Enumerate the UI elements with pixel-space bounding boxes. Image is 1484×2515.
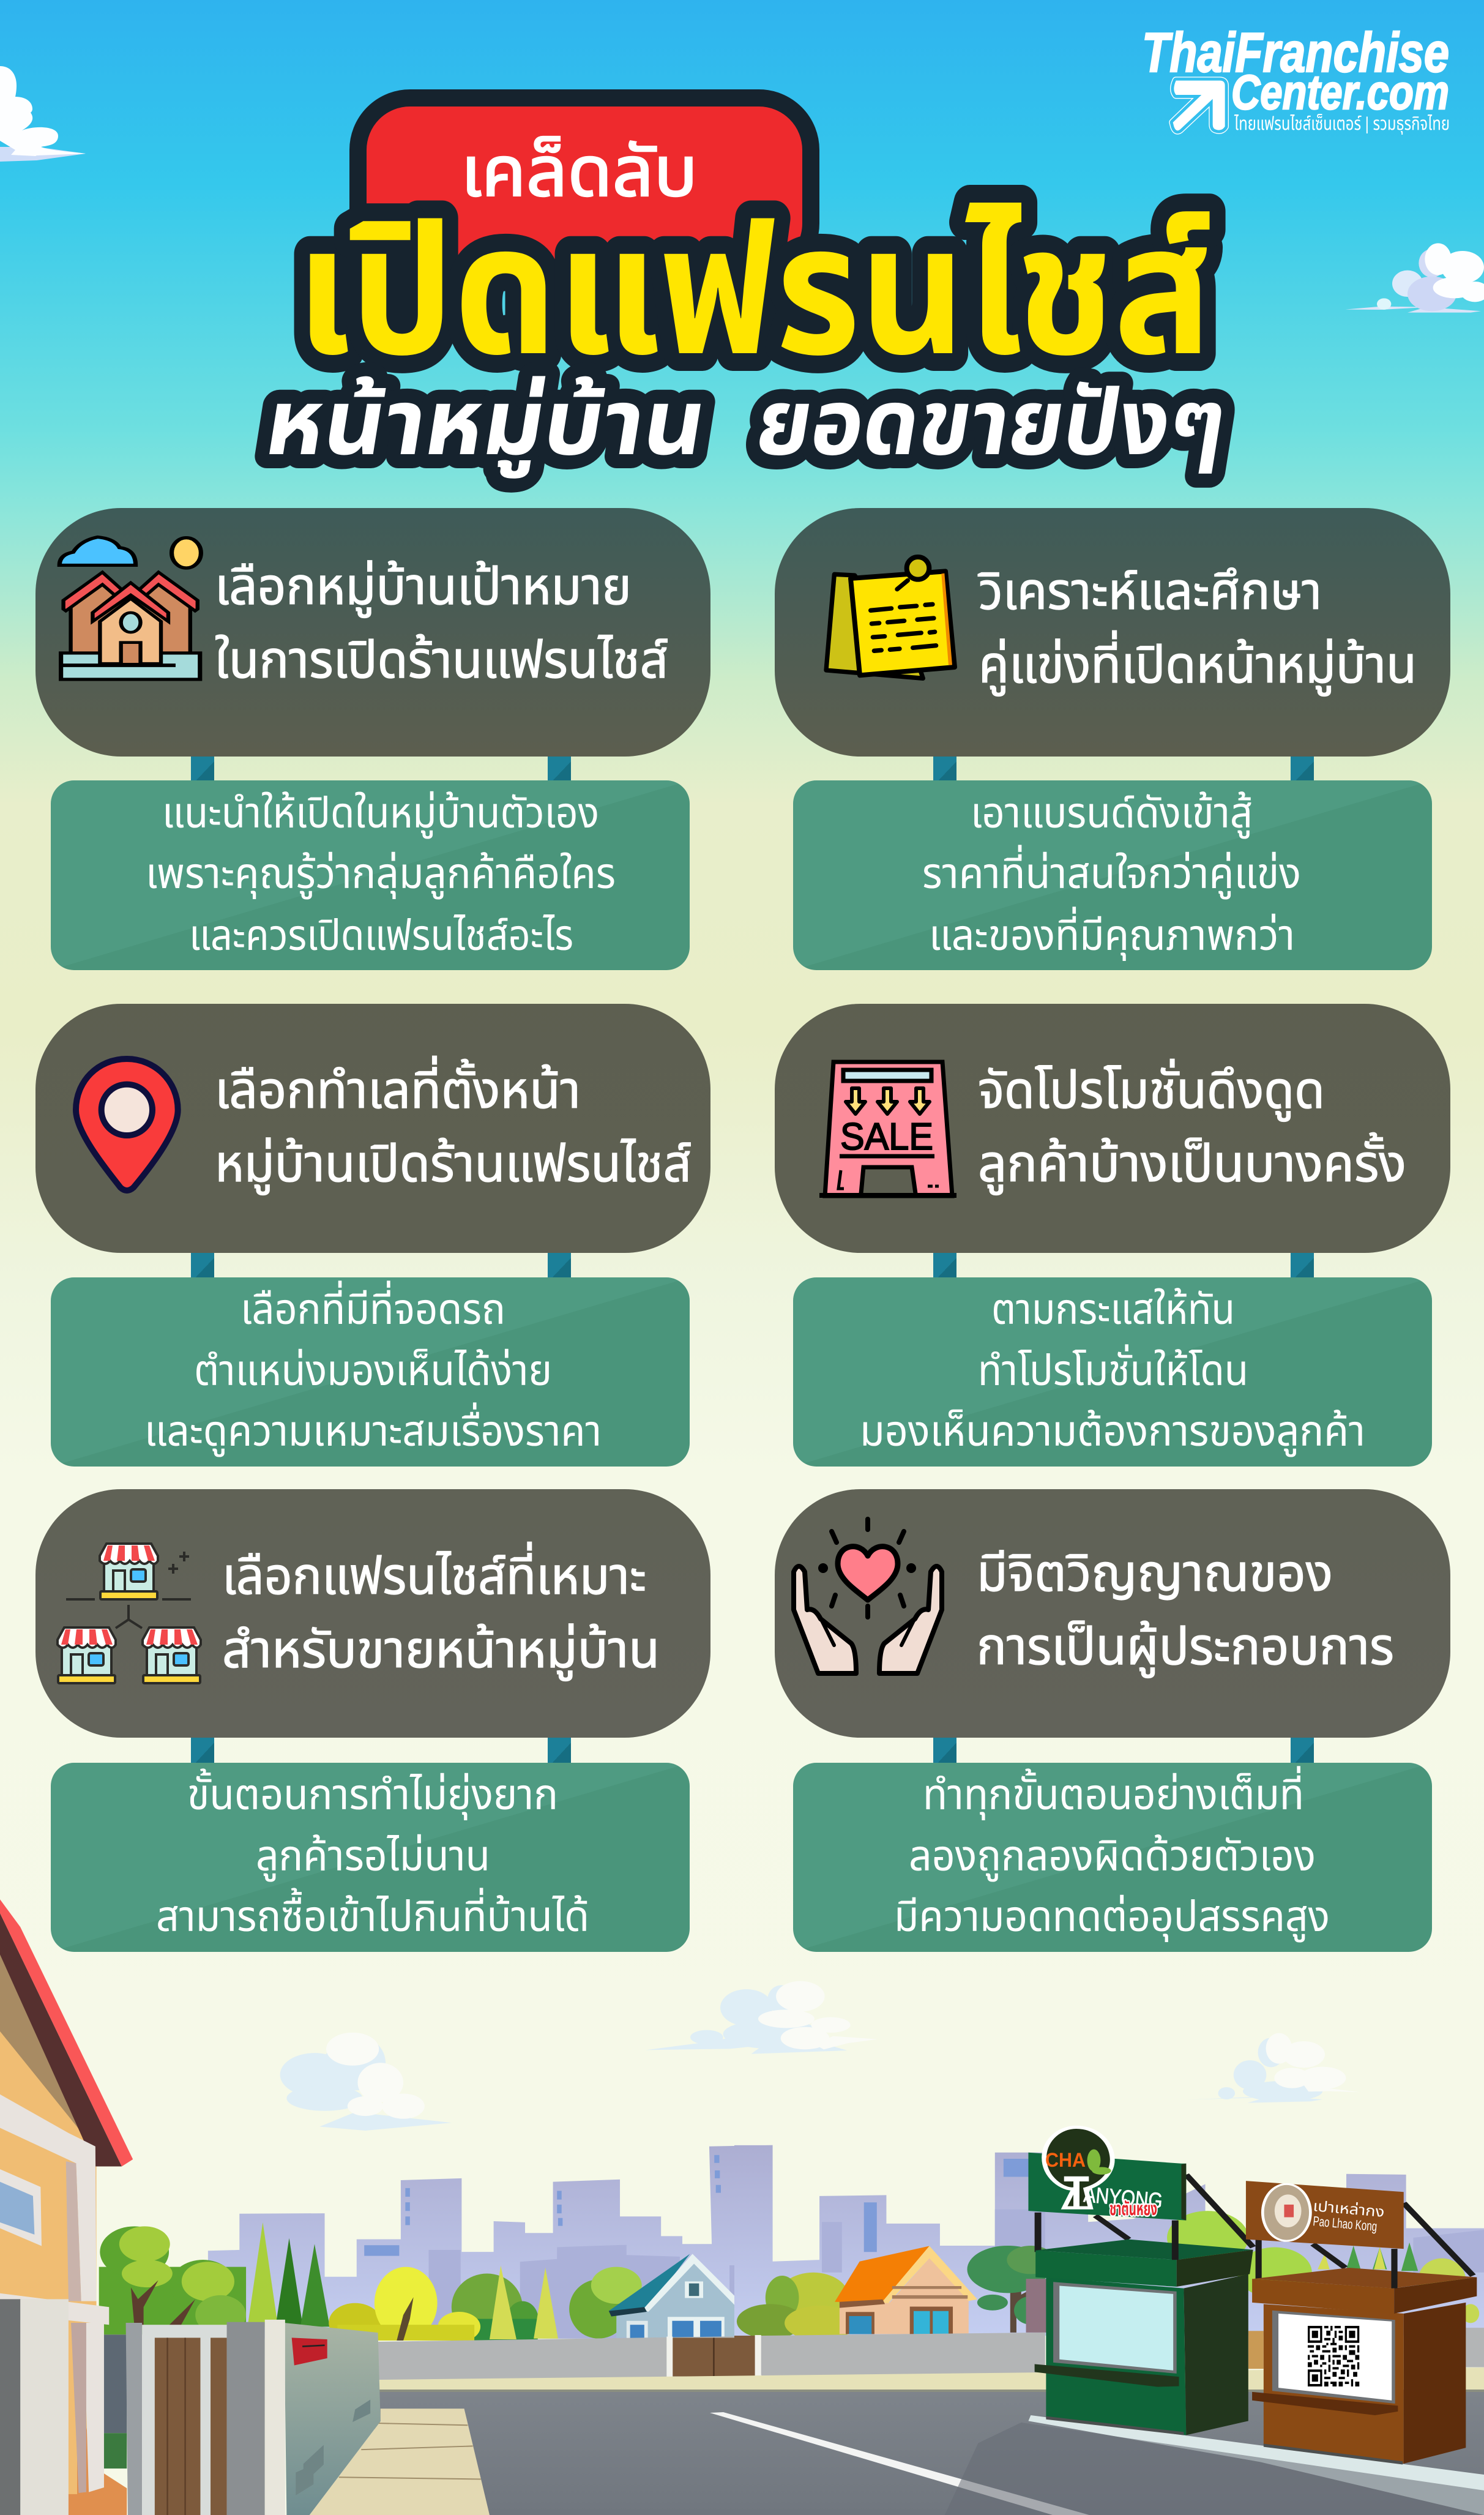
panel: tip 2 analyse competitors (775, 508, 1450, 970)
clouds: lower sky (280, 1981, 1360, 2131)
panel: tip 4 promotions: มองเห็นความต้องการของลูกค้า (860, 1407, 1365, 1457)
panel: tip 1 choose village: ในการเปิดร้านแฟรนไชส์ (215, 631, 668, 689)
illustration: skyline and far houses (99, 2145, 1484, 2380)
panel: tip 4 promotions: ลูกค้าบ้างเป็นบางครั้ง (978, 1132, 1406, 1195)
panel: tip 5 choose franchise: สามารถซื้อเข้าไปกินที่บ้านได้ (156, 1888, 589, 1940)
description: เลือกที่มีที่จอดรถ (240, 1280, 505, 1333)
panel: tip 6 entrepreneur spirit: มีความอดทดต่ออุปสรรคสูง (894, 1893, 1330, 1943)
panel: tip 1 choose village: เพราะคุณรู้ว่ากลุ่มลูกค้าคือใคร (146, 850, 616, 900)
description: เอาแบรนด์ดังเข้าสู้ (971, 789, 1253, 839)
panel: tip 2 analyse competitors: ราคาที่น่าสนใจกว่าคู่แข่ง (922, 845, 1301, 900)
illustration: brown kiosk Pao Lhao Kong (1246, 2181, 1477, 2465)
panel: tip 2 analyse competitors: คู่แข่งที่เปิดหน้าหมู่บ้าน (979, 630, 1417, 696)
panel: tip 6 entrepreneur spirit (775, 1489, 1450, 1952)
icon: map pin (76, 1059, 178, 1190)
back wall (378, 2336, 796, 2380)
trees (99, 2226, 246, 2334)
illustration: road and sidewalk (367, 2367, 1484, 2515)
icon: hands and heart (794, 1519, 942, 1673)
heading: มีจิตวิญญาณของ (977, 1544, 1333, 1602)
kiosk window (1053, 2282, 1177, 2374)
heading: เลือกแฟรนไชส์ที่เหมาะ (222, 1542, 646, 1605)
title block (258, 98, 1234, 479)
description: แนะนำให้เปิดในหมู่บ้านตัวเอง (162, 789, 599, 839)
cloud: top left (0, 66, 86, 162)
cloud: top right (1345, 243, 1484, 313)
blue house (616, 2262, 737, 2337)
heading: วิเคราะห์และศึกษา (977, 562, 1322, 620)
title line: หน้าหมู่บ้าน: หน้าหมู่บ้าน (258, 371, 714, 479)
illustration: green kiosk Cha Tanyong (1028, 2127, 1253, 2435)
panel: tip 3 choose location: และดูความเหมาะสมเรื่องราคา (144, 1402, 602, 1457)
sidewalk tiles (310, 2408, 490, 2515)
illustration: green kiosk Cha Tanyong: CHA (1045, 2149, 1086, 2171)
title line: เคล็ดลับ: เคล็ดลับ (461, 133, 698, 211)
panel: tip 1 choose village (35, 508, 710, 970)
panel: tip 1 choose village: และควรเปิดแฟรนไชส์อะไร (189, 911, 573, 959)
QR code (1308, 2326, 1359, 2386)
heading: จัดโปรโมชั่นดึงดูด (978, 1059, 1325, 1121)
description: ทำทุกขั้นตอนอย่างเต็มที่ (923, 1766, 1304, 1820)
panel: tip 3 choose location (35, 1004, 710, 1467)
title line: เปิดแฟรนไชส์: เปิดแฟรนไชส์ (296, 189, 1212, 392)
panel: tip 4 promotions: ทำโปรโมชั่นให้โดน (978, 1344, 1248, 1394)
icon: sticky note (826, 557, 955, 678)
icon: logo arrow (1173, 81, 1225, 130)
gate wall (284, 2323, 381, 2515)
panel: tip 5 choose franchise (35, 1489, 710, 1952)
panel: tip 3 choose location: ตำแหน่งมองเห็นได้ง่าย (194, 1347, 552, 1394)
description: ตามกระแสให้ทัน (991, 1285, 1235, 1333)
description: ขั้นตอนการทำไม่ยุ่งยาก (187, 1768, 558, 1820)
heading: เลือกทำเลที่ตั้งหน้า (215, 1056, 581, 1119)
icon: franchise shops (58, 1544, 201, 1683)
icon: sale board (819, 1062, 956, 1196)
title badge: red pill (358, 98, 811, 275)
icon: sale board: SALE (840, 1116, 933, 1158)
panel: tip 6 entrepreneur spirit: ลองถูกลองผิดด้วยตัวเอง (909, 1832, 1316, 1882)
illustration: brown kiosk Pao Lhao Kong: เปาเหล่ากง (1312, 2197, 1385, 2221)
title line: ยอดขายปังๆ: ยอดขายปังๆ (750, 371, 1234, 474)
panel: tip 5 choose franchise: ลูกค้ารอไม่นาน (256, 1832, 490, 1882)
panel: tip 4 promotions (775, 1004, 1450, 1467)
illustration: left house and gate (0, 1899, 490, 2515)
kiosk sign board (1028, 2153, 1186, 2221)
illustration: brown kiosk Pao Lhao Kong: Pao Lhao Kong (1313, 2213, 1378, 2234)
illustration: green kiosk Cha Tanyong: ชาตันหยง (1109, 2199, 1157, 2219)
icon: houses (59, 537, 201, 679)
logo: ThaiFranchise Center (1142, 22, 1450, 135)
panel: tip 5 choose franchise: สำหรับขายหน้าหมู่บ้าน (222, 1621, 660, 1681)
kiosk curb and shadow (945, 2415, 1484, 2515)
illustration: green kiosk Cha Tanyong: T (1064, 2167, 1089, 2218)
mailbox (292, 2337, 327, 2365)
panel: tip 2 analyse competitors: และของที่มีคุณภาพกว่า (929, 906, 1295, 961)
panel: tip 6 entrepreneur spirit: การเป็นผู้ประกอบการ (977, 1618, 1394, 1678)
heading: เลือกหมู่บ้านเป้าหมาย (215, 558, 632, 618)
road line (710, 2412, 1089, 2515)
illustration: green kiosk Cha Tanyong: ANYONG (1083, 2181, 1163, 2213)
panel: tip 3 choose location: หมู่บ้านเปิดร้านแฟรนไชส์ (215, 1135, 692, 1195)
